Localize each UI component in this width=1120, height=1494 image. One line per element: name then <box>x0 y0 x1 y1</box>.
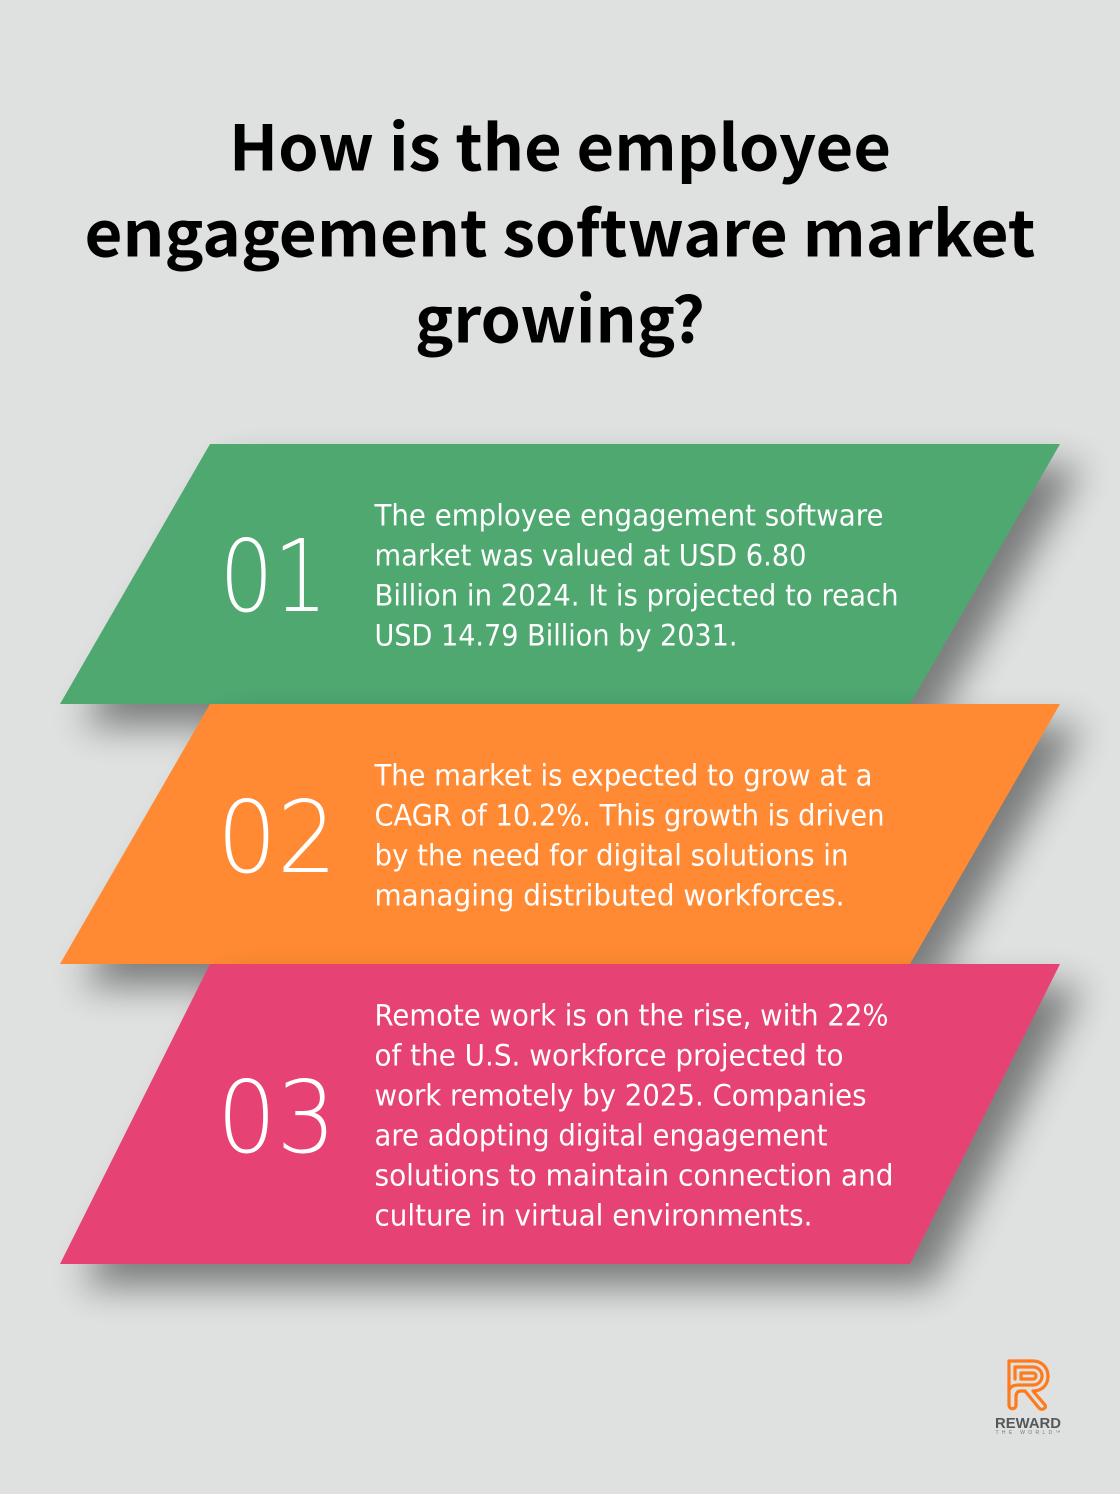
text block 01: market was valued at USD 6.80 <box>374 538 806 572</box>
text block 03: Remote work is on the rise, with 22% <box>374 998 888 1032</box>
title: engagement software market <box>84 184 1036 276</box>
text block 02: by the need for digital solutions in <box>374 838 848 872</box>
text block 02: managing distributed workforces. <box>374 878 844 912</box>
text block 02: CAGR of 10.2%. This growth is driven <box>374 798 884 832</box>
logo: Reward the World <box>995 1361 1061 1436</box>
text block 03 <box>374 998 894 1232</box>
text block 02 <box>374 758 884 912</box>
text block 03: of the U.S. workforce projected to <box>374 1038 844 1072</box>
title <box>84 98 1036 362</box>
panel: step 03 <box>60 964 1082 1286</box>
text block 03: are adopting digital engagement <box>374 1118 828 1152</box>
number 01: 01 <box>220 518 328 635</box>
title: How is the employee <box>229 98 891 190</box>
text block 03: solutions to maintain connection and <box>374 1158 894 1192</box>
text block 01: USD 14.79 Billion by 2031. <box>374 618 738 652</box>
panel: step 01 <box>60 444 1082 726</box>
text block 01: The employee engagement software <box>374 498 884 532</box>
number 02: 02 <box>217 779 337 896</box>
wordmark: REWARD <box>995 1415 1061 1432</box>
tagline: THE WORLD™ <box>996 1430 1060 1436</box>
title: growing? <box>415 270 705 362</box>
text block 03: culture in virtual environments. <box>374 1198 812 1232</box>
panel: step 02 <box>60 704 1082 986</box>
text block 03: work remotely by 2025. Companies <box>374 1078 866 1112</box>
text block 01 <box>374 498 899 652</box>
number 03: 03 <box>217 1059 336 1176</box>
text block 02: The market is expected to grow at a <box>374 758 872 792</box>
icon: orange R mark <box>1009 1361 1048 1409</box>
text block 01: Billion in 2024. It is projected to reach <box>374 578 898 612</box>
